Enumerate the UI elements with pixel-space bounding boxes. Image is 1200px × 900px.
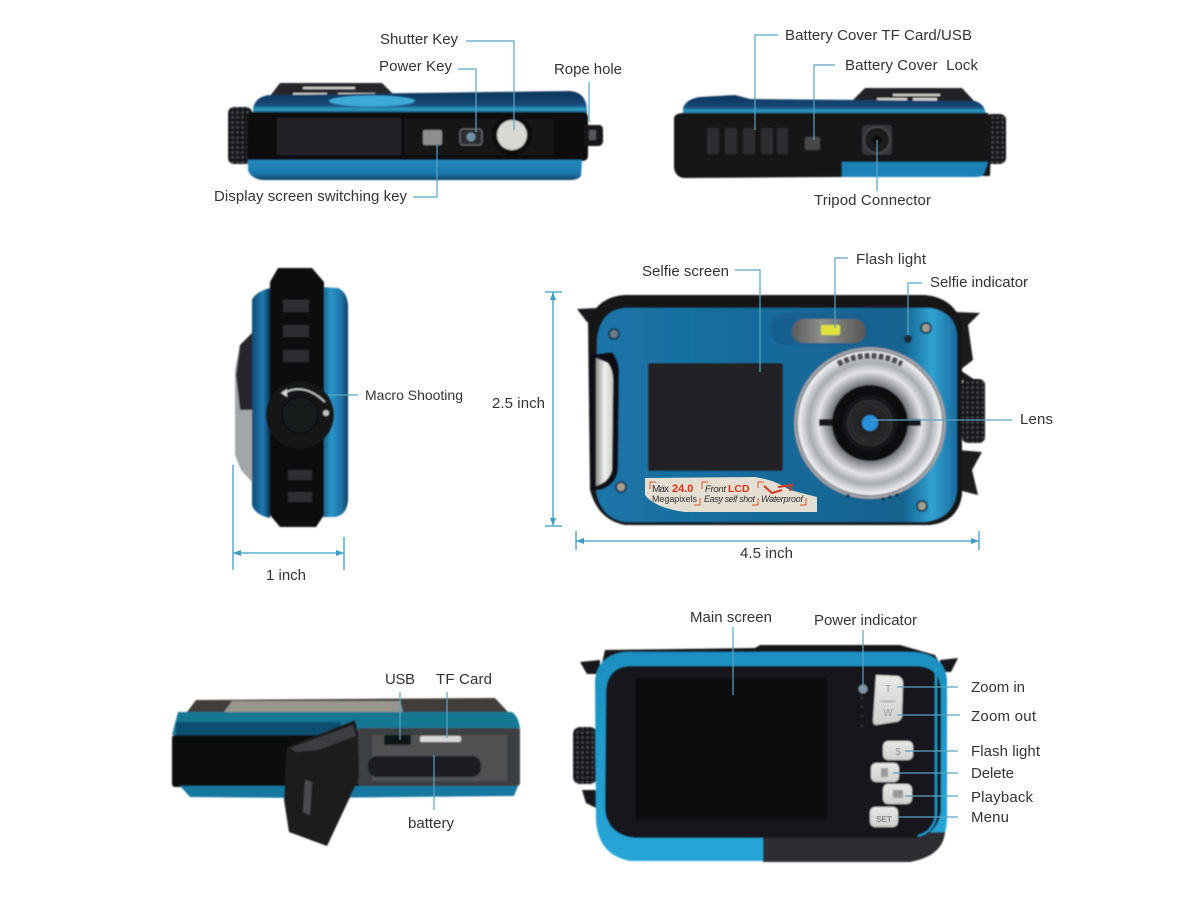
back button glyphs: $ (895, 747, 901, 758)
labels: back view: Playback (971, 789, 1034, 806)
swimmer icon (764, 485, 792, 493)
labels: side and front views: Macro Shooting (365, 387, 463, 403)
labels: bottom view: Battery Cover Lock (845, 57, 978, 74)
labels: side and front views: Selfie screen (642, 263, 729, 280)
labels: back view: Main screen (690, 609, 772, 626)
sticker background (645, 477, 817, 512)
grey panel (277, 118, 401, 155)
right blue shell (320, 287, 348, 517)
leader lines (328, 35, 1012, 817)
dimension: 1 inch depth (233, 465, 344, 584)
zoom dial (573, 727, 597, 784)
power key (460, 129, 482, 145)
labels: side and front views: Flash light (856, 251, 927, 268)
delete button (871, 763, 899, 782)
flash lamp (821, 325, 840, 335)
labels: top view: Power Key (379, 58, 452, 75)
ribbed battery cover (707, 128, 788, 154)
labels: bottom view (785, 27, 978, 209)
black back panel (605, 666, 941, 838)
zoom dial (962, 379, 985, 443)
selfie indicator (904, 335, 912, 343)
ears (580, 660, 600, 674)
USB port (384, 735, 411, 745)
labels: back view (690, 609, 1041, 826)
screws (609, 329, 619, 339)
labels: top view: Rope hole (554, 61, 622, 78)
black top edge (600, 645, 945, 672)
camera: top view with shutter and power keys (228, 83, 603, 180)
power indicator (858, 684, 868, 694)
top lid with screen (187, 698, 508, 712)
right blue stripe (918, 668, 936, 836)
key panel (404, 119, 554, 155)
TF card slot (420, 736, 461, 742)
battery cover lock (805, 137, 820, 150)
dimension: 4.5 inch width (576, 531, 979, 562)
black outer body (588, 295, 962, 525)
labels: side and front views: Selfie indicator (930, 274, 1028, 291)
hand grip (590, 352, 619, 490)
top flash hump (270, 83, 395, 96)
labels: open battery view: USB (385, 671, 415, 688)
labels: open battery view: battery (408, 815, 454, 832)
playback button (883, 784, 912, 804)
bottom blue band (180, 786, 518, 798)
front sticker: Megapixels (652, 494, 698, 504)
dimension: 2.5 inch height: 2.5 inch (492, 395, 545, 412)
battery (368, 756, 481, 777)
light blue button (329, 96, 415, 106)
labels: open battery view: TF Card (436, 671, 492, 688)
labels: side and front views: Lens (1020, 411, 1053, 428)
black middle (270, 268, 324, 527)
shutter key (492, 115, 532, 155)
blue shell (595, 652, 947, 861)
blue corner segment (842, 162, 988, 177)
dimension: 4.5 inch width: 4.5 inch (740, 545, 793, 562)
labels: back view: Power indicator (814, 612, 917, 629)
lens (794, 347, 946, 499)
top blue (683, 95, 986, 115)
labels: back view: Zoom in (971, 679, 1025, 696)
sticker text: Max (652, 484, 669, 495)
tripod connector (862, 125, 892, 155)
camera: back view (573, 645, 958, 862)
black middle band (247, 112, 588, 161)
top blue body (253, 91, 587, 114)
dimension: 2.5 inch height (492, 292, 562, 526)
battery compartment (358, 728, 520, 786)
blue front plate (596, 308, 957, 522)
labels: top view: Display screen switching key (214, 188, 408, 205)
macro dial (266, 381, 334, 449)
zoom dial (228, 107, 252, 164)
labels: back view: Delete (971, 765, 1014, 782)
labels: side and front views (365, 251, 1053, 428)
camera: side view with macro dial (235, 268, 348, 527)
blue upper band (172, 712, 520, 735)
rope lug (584, 125, 603, 146)
display switching key (423, 130, 442, 145)
dark blue left shade (176, 722, 341, 736)
left blue shell (252, 288, 270, 518)
top hump (853, 88, 975, 102)
camera: front view (577, 295, 985, 525)
labels: top view: Shutter Key (380, 31, 458, 48)
labels: top view (214, 31, 622, 205)
labels: back view: Flash light (971, 743, 1041, 760)
back button glyphs: T (885, 684, 891, 695)
back button glyphs: SET (876, 815, 892, 824)
menu button (870, 807, 898, 827)
labels: back view: Zoom out (971, 708, 1037, 725)
red corner marks (650, 482, 806, 505)
front sticker (645, 477, 817, 512)
ribbed grip (283, 300, 312, 502)
labels: bottom view: Battery Cover TF Card/USB (785, 27, 972, 44)
selfie screen (648, 363, 783, 471)
flash button (883, 741, 913, 760)
dimension: 1 inch depth: 1 inch (266, 567, 306, 584)
front sticker: 24.0 (672, 483, 693, 495)
back button glyphs: W (883, 708, 893, 719)
front sticker: Waterproof (761, 494, 804, 504)
zoom buttons (873, 675, 903, 725)
protruding lens profile (235, 333, 252, 482)
body black (674, 113, 992, 178)
indicator dots (861, 697, 863, 727)
front sticker: Easy self shot (704, 494, 755, 504)
bottom blue band (248, 160, 582, 180)
camera: bottom view with open battery door (172, 698, 520, 846)
front sticker: LCD (728, 483, 750, 495)
black left area (172, 735, 362, 787)
camera: bottom view with battery cover and tripod connector (674, 88, 1006, 178)
labels: open battery view (385, 671, 492, 832)
open battery door (284, 720, 359, 846)
back button glyphs (876, 684, 901, 824)
labels: back view: Menu (971, 809, 1009, 826)
main screen (635, 678, 827, 820)
corner ears (577, 308, 597, 324)
dark lower right section (763, 832, 945, 862)
front sticker: Front (705, 484, 726, 495)
microphone dots (846, 493, 899, 501)
flash housing (770, 313, 869, 346)
labels: bottom view: Tripod Connector (814, 192, 931, 209)
right dial (986, 114, 1006, 164)
